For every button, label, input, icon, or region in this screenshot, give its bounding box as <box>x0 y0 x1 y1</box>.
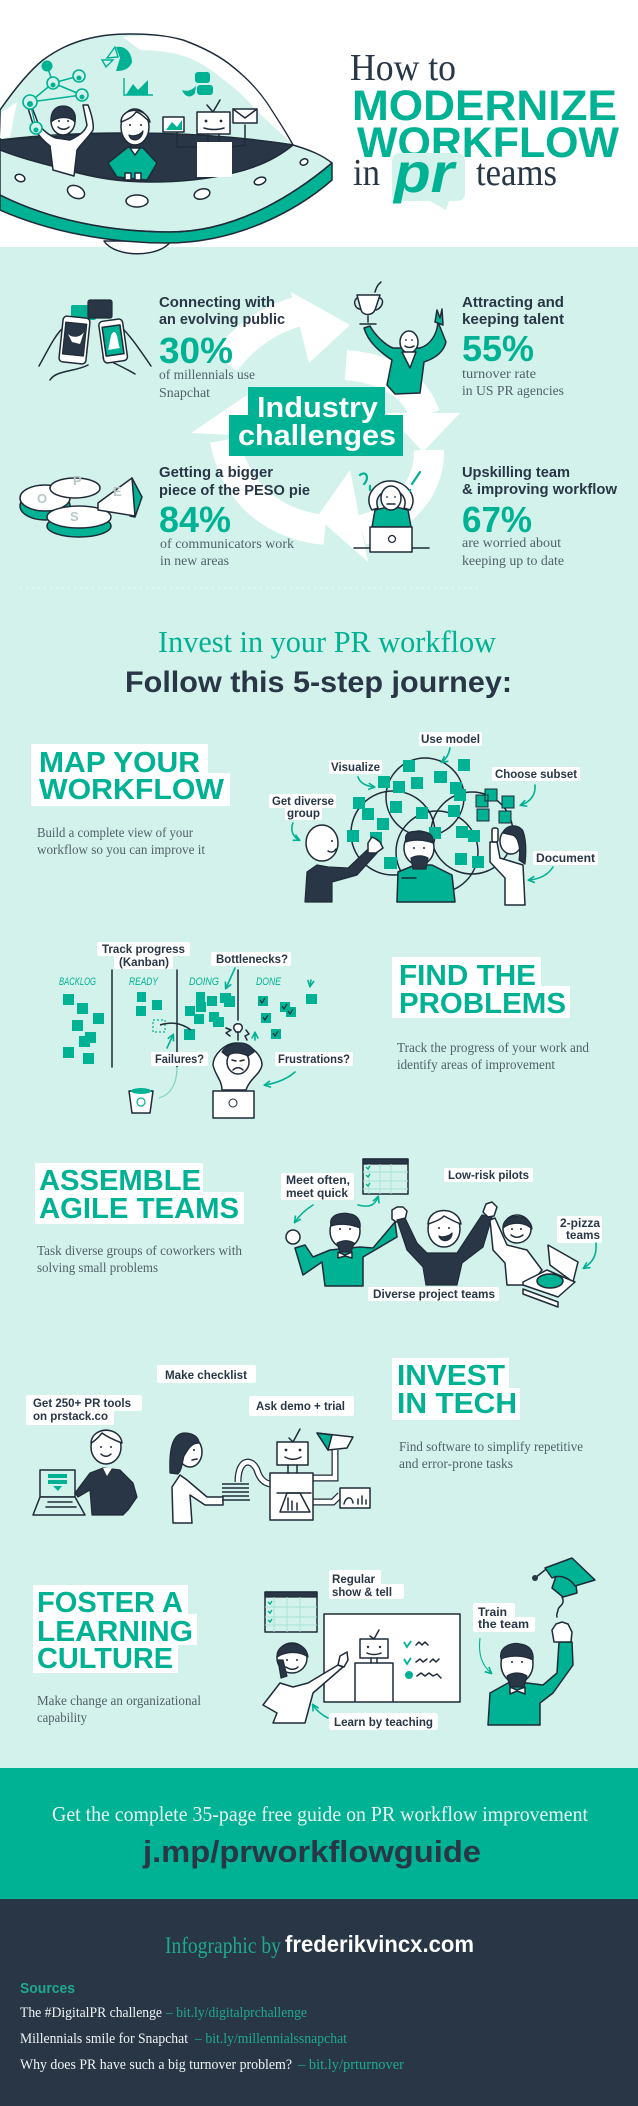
schedule table <box>363 1159 408 1194</box>
label: choose subset: Choose subset <box>495 767 577 781</box>
step 2: find the problems: FIND THE <box>399 960 536 992</box>
label: regular show and tell <box>329 1570 404 1599</box>
icon: PESO pie: E <box>113 484 122 499</box>
kanban column titles <box>59 976 282 988</box>
stat: connecting with an evolving public: of millennials use <box>159 367 255 382</box>
stat: upskilling team: keeping up to date <box>462 553 564 568</box>
robot <box>163 100 257 177</box>
heading: industry challenges: challenges <box>238 420 396 452</box>
man throwing cap <box>488 1622 573 1725</box>
title: in <box>353 152 380 194</box>
heading: follow this 5-step journey: Follow this 5-step journey: <box>125 666 512 699</box>
icon: man with trophy <box>355 282 446 394</box>
stat: getting a bigger piece of the PESO pie: Getting a bigger <box>159 465 273 481</box>
step 3: assemble agile teams: Task diverse groups of coworkers with <box>37 1243 242 1258</box>
panel: call to action: Get the complete 35-page free guide on PR workflow improvement <box>52 1802 588 1826</box>
step 1: map your workflow: Build a complete view of your <box>37 825 193 840</box>
label: get 250+ PR tools: on prstack.co <box>33 1409 108 1423</box>
title: WORKFLOW <box>357 119 619 167</box>
stat: getting a bigger piece of the PESO pie: of communicators work <box>160 536 294 551</box>
panel: footer: The #DigitalPR challenge <box>20 2005 162 2021</box>
stat: connecting with an evolving public: 30% <box>159 330 233 371</box>
sticky notes <box>347 759 514 869</box>
kanban column titles: BACKLOG <box>59 976 96 988</box>
stat: attracting and keeping talent: turnover rate <box>462 366 536 381</box>
label: meet often, meet quick: meet quick <box>286 1186 348 1200</box>
step 5: foster a learning culture: LEARNING <box>37 1616 193 1648</box>
step 4: invest in tech: INVEST <box>397 1360 505 1392</box>
step 2: find the problems: identify areas of improvement <box>397 1057 555 1072</box>
heading: industry challenges: Industry <box>257 392 378 424</box>
step 3: assemble agile teams: ASSEMBLE <box>39 1165 201 1197</box>
panel: footer <box>0 1899 638 2106</box>
title: pr <box>392 141 457 204</box>
stat: attracting and keeping talent <box>462 295 564 398</box>
stat: connecting with an evolving public: an evolving public <box>159 312 285 328</box>
step 5: foster a learning culture <box>33 1585 201 1725</box>
saucer green rim <box>0 163 332 243</box>
label: get 250+ PR tools <box>26 1395 142 1425</box>
label: 2-pizza teams <box>557 1216 602 1243</box>
label: learn by teaching: Learn by teaching <box>334 1715 433 1729</box>
label: 2-pizza teams: 2-pizza <box>560 1216 600 1230</box>
arrows <box>313 1638 491 1718</box>
icon: PESO pie: P <box>73 473 82 488</box>
icon: hands with phones <box>39 300 151 380</box>
illustration: learning by teaching <box>263 1558 595 1730</box>
label: train the team <box>473 1603 535 1632</box>
label: low-risk pilots: Low-risk pilots <box>448 1168 529 1182</box>
step 4: invest in tech: Find software to simplify repetitive <box>399 1439 583 1454</box>
step 2: find the problems <box>392 957 589 1072</box>
step 4: invest in tech: IN TECH <box>397 1388 517 1420</box>
label: get diverse group: Get diverse <box>272 794 334 808</box>
label: failures: Failures? <box>155 1052 204 1066</box>
step 3: assemble agile teams <box>35 1163 244 1275</box>
label: get 250+ PR tools: Get 250+ PR tools <box>33 1396 131 1410</box>
robot <box>238 1429 370 1520</box>
middle person <box>397 831 455 902</box>
step 2: find the problems: Track the progress of your work and <box>397 1040 589 1055</box>
stat: getting a bigger piece of the PESO pie: in new areas <box>160 553 229 568</box>
man with laptop <box>33 1430 137 1515</box>
man in dark <box>397 1210 492 1285</box>
icon: PESO pie <box>20 473 142 537</box>
stat: connecting with an evolving public <box>159 295 285 400</box>
whiteboard <box>324 1614 460 1702</box>
illustration: venn workflow map <box>269 732 598 905</box>
stat: upskilling team <box>462 465 618 568</box>
label: meet often, meet quick: Meet often, <box>286 1173 350 1187</box>
panel: footer: Sources <box>20 1981 75 1997</box>
panel: footer: – bit.ly/prturnover <box>297 2057 404 2073</box>
label: diverse project teams: Diverse project teams <box>373 1287 495 1301</box>
stressed person <box>213 1024 262 1090</box>
icon: PESO pie: S <box>70 509 79 524</box>
step 2: find the problems: PROBLEMS <box>399 988 566 1020</box>
panel: call to action: j.mp/prworkflowguide <box>142 1834 481 1869</box>
step 1: map your workflow: workflow so you can improve it <box>37 842 205 857</box>
panel: footer: Why does PR have such a big turnover problem? <box>20 2057 292 2073</box>
step 1: map your workflow <box>31 744 230 857</box>
laptop <box>213 1091 254 1118</box>
label: document: Document <box>536 851 595 865</box>
line chart icon <box>124 78 153 95</box>
illustration: flying saucer with team <box>0 34 332 254</box>
stat: attracting and keeping talent: 55% <box>462 328 534 369</box>
stat: attracting and keeping talent: in US PR agencies <box>462 383 564 398</box>
label: meet often, meet quick <box>281 1173 354 1200</box>
label: regular show and tell: show & tell <box>332 1585 392 1599</box>
label: track progress <box>97 942 190 969</box>
step 1: map your workflow: WORKFLOW <box>39 774 225 806</box>
arrows: challenge cycle <box>191 292 460 562</box>
arrows <box>292 748 553 880</box>
illustration: diverse project team <box>281 1159 602 1307</box>
step 4: invest in tech: and error-prone tasks <box>399 1456 513 1471</box>
label: visualize: Visualize <box>331 760 380 774</box>
kanban column titles: DOING <box>189 976 219 988</box>
flow icon <box>182 72 213 96</box>
arrows <box>295 1197 596 1268</box>
title: teams <box>476 152 557 194</box>
label: track progress: (Kanban) <box>119 955 169 969</box>
stat: getting a bigger piece of the PESO pie: 84% <box>159 499 231 540</box>
step 5: foster a learning culture: FOSTER A <box>37 1587 183 1619</box>
left person <box>305 825 383 902</box>
heading: industry challenges <box>229 387 403 456</box>
label: make checklist: Make checklist <box>165 1368 247 1382</box>
label: track progress: Track progress <box>102 942 185 956</box>
stat: upskilling team: are worried about <box>462 535 561 550</box>
right person <box>490 826 526 905</box>
title: MODERNIZE <box>352 82 617 130</box>
heading: invest in your PR workflow: Invest in your PR workflow <box>158 624 497 659</box>
woman with network <box>23 60 93 176</box>
stat: upskilling team: & improving workflow <box>462 482 618 498</box>
stat: attracting and keeping talent: keeping talent <box>462 312 564 328</box>
saucer interior <box>0 133 293 182</box>
title <box>350 47 619 210</box>
icon: worried woman at laptop <box>354 472 429 552</box>
stat: upskilling team: Upskilling team <box>462 465 570 481</box>
label: bottlenecks: Bottlenecks? <box>216 952 288 966</box>
saucer hull <box>0 145 332 232</box>
stat: attracting and keeping talent: Attracting and <box>462 295 564 311</box>
man in green <box>108 109 157 180</box>
arrows <box>167 968 311 1085</box>
pizza box <box>523 1245 578 1307</box>
label: use model: Use model <box>421 732 480 746</box>
pie chart icon <box>102 47 132 71</box>
step 4: invest in tech <box>392 1358 583 1471</box>
step 5: foster a learning culture: CULTURE <box>37 1643 173 1675</box>
step 5: foster a learning culture: Make change an organizational <box>37 1693 201 1708</box>
portholes <box>14 158 309 207</box>
saucer dome <box>0 34 293 145</box>
kanban column titles: READY <box>129 976 159 988</box>
label: 2-pizza teams: teams <box>566 1228 600 1242</box>
background: mint body <box>0 247 638 1768</box>
kanban column titles: DONE <box>256 976 282 988</box>
step 3: assemble agile teams: solving small problems <box>37 1260 158 1275</box>
panel: footer: – bit.ly/digitalprchallenge <box>165 2005 307 2021</box>
label: get diverse group <box>269 794 336 820</box>
stat: connecting with an evolving public: Connecting with <box>159 295 275 311</box>
step 3: assemble agile teams: AGILE TEAMS <box>39 1193 239 1225</box>
stat: upskilling team: 67% <box>462 499 532 540</box>
illustration: tools and robot <box>26 1365 370 1523</box>
teaching woman <box>263 1643 348 1723</box>
recycling bin <box>129 1088 153 1113</box>
panel: footer: frederikvincx.com <box>285 1931 474 1957</box>
label: make checklist <box>157 1365 256 1383</box>
woman handing papers <box>170 1433 250 1523</box>
panel: footer: – bit.ly/millennialssnapchat <box>194 2031 348 2047</box>
label: ask demo + trial <box>249 1396 354 1416</box>
faint dotted divider <box>20 587 480 589</box>
label: train the team: Train <box>478 1605 507 1619</box>
graduation cap <box>532 1558 595 1617</box>
title: How to <box>350 47 456 89</box>
icon: PESO pie: O <box>37 491 47 506</box>
stat: connecting with an evolving public: Snapchat <box>159 385 210 400</box>
label: regular show and tell: Regular <box>332 1572 375 1586</box>
stat: getting a bigger piece of the PESO pie: piece of the PESO pie <box>159 483 310 499</box>
label: frustrations: Frustrations? <box>278 1052 350 1066</box>
stat: getting a bigger piece of the PESO pie <box>159 465 310 568</box>
step 5: foster a learning culture: capability <box>37 1710 87 1725</box>
label: ask demo + trial: Ask demo + trial <box>256 1399 345 1413</box>
PR speech bubble <box>392 153 465 210</box>
woman in white <box>483 1202 542 1285</box>
kanban stickies <box>63 992 317 1064</box>
panel: footer: Infographic by <box>165 1933 281 1958</box>
label: train the team: the team <box>478 1617 529 1631</box>
illustration: kanban board <box>59 942 353 1118</box>
schedule table <box>265 1592 317 1632</box>
man in green <box>286 1207 407 1286</box>
background: white header <box>0 0 638 247</box>
step 1: map your workflow: MAP YOUR <box>39 747 200 779</box>
label: get diverse group: group <box>287 806 320 820</box>
panel: footer: Millennials smile for Snapchat <box>20 2031 189 2047</box>
panel: call to action <box>0 1768 638 1899</box>
